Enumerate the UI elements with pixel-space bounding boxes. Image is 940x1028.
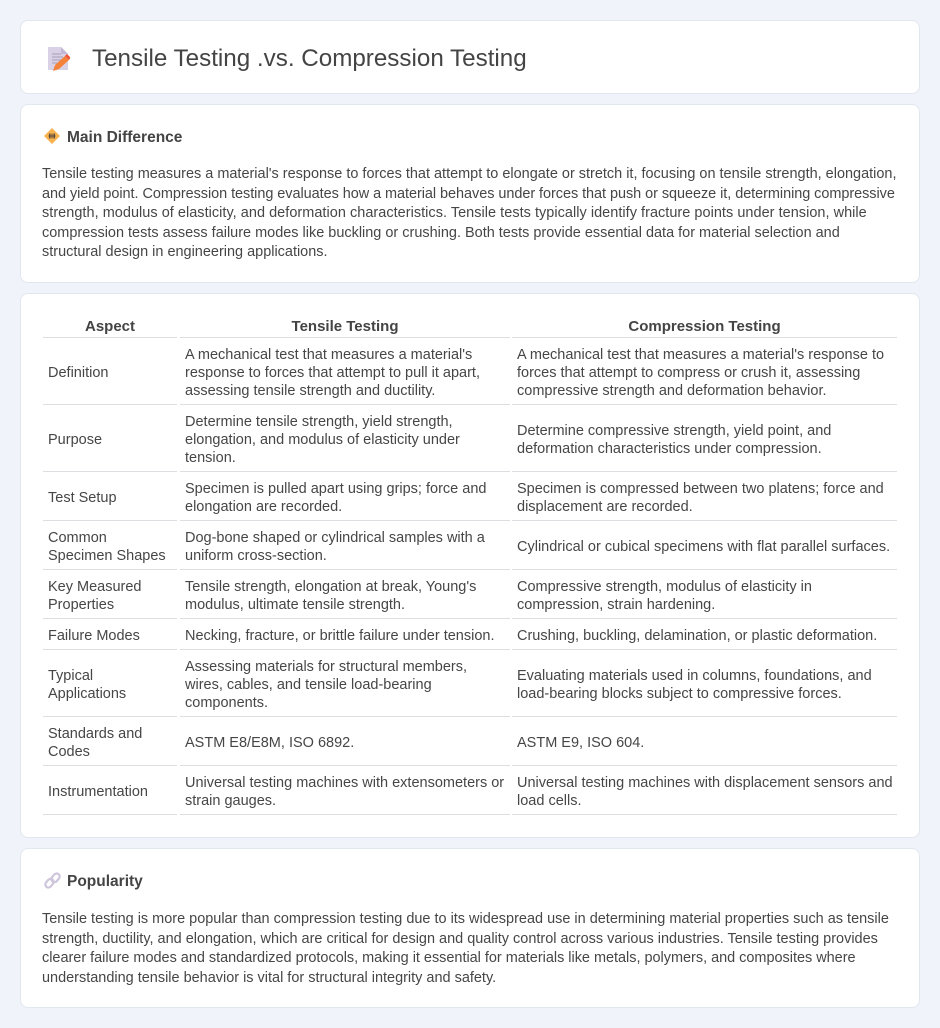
text block: main difference: compression tests assess failure modes like buckling or crushing. Both tests provide essential data for material selection and — [42, 224, 840, 240]
panel: comparison table — [20, 293, 920, 838]
table: comparison: Assessing materials for structural members, — [185, 659, 467, 675]
icon: warning diamond — [44, 128, 60, 144]
table: comparison: Crushing, buckling, delamination, or plastic deformation. — [517, 628, 877, 644]
table: comparison: Specimen is compressed between two platens; force and — [517, 481, 884, 497]
heading: popularity: Popularity — [67, 873, 143, 890]
text block: popularity: understanding tensile behavior is vital for structural integrity and safety. — [42, 970, 496, 986]
text block: popularity — [42, 911, 889, 986]
table: comparison: A mechanical test that measures a material's response to — [517, 347, 884, 363]
table: comparison: load cells. — [517, 793, 581, 809]
panel: main difference — [20, 104, 920, 283]
row: key measured properties: Key Measured — [48, 579, 142, 595]
table: comparison: Tensile strength, elongation at break, Young's — [185, 579, 476, 595]
table: comparison: strain gauges. — [185, 793, 276, 809]
table: comparison: Determine tensile strength, yield strength, — [185, 414, 453, 430]
text block: main difference: Tensile testing measures a material's response to forces that attempt to elongate or stretch it, focusing on tensile strength, elongation, — [42, 166, 896, 182]
table: comparison: Specimen is pulled apart using grips; force and — [185, 481, 486, 497]
row: typical applications: Applications — [48, 686, 126, 702]
text block: main difference: and yield point. Compression testing evaluates how a material behaves under forces that push or squeeze it, determining compressive — [42, 186, 895, 202]
table: comparison: load-bearing blocks subject to compressive forces. — [517, 686, 842, 702]
table: comparison: Universal testing machines with displacement sensors and — [517, 775, 893, 791]
table: comparison: Dog-bone shaped or cylindrical samples with a — [185, 530, 485, 546]
row: key measured properties — [48, 579, 142, 613]
row: typical applications: Typical — [48, 668, 93, 684]
text block: popularity: clearer failure modes and standardized protocols, making it essential for materials like metals, polymers, and composites where — [42, 950, 856, 966]
table: comparison: elongation, and modulus of elasticity under — [185, 432, 460, 448]
row: typical applications — [48, 668, 126, 702]
table: comparison: Universal testing machines with extensometers or — [185, 775, 504, 791]
row: common specimen shapes — [48, 530, 166, 564]
panel: title — [20, 20, 920, 94]
table: comparison: tension. — [185, 450, 236, 466]
table: comparison: wires, cables, and tensile load-bearing — [185, 677, 432, 693]
icon: chain link — [44, 872, 61, 889]
table: comparison: Cylindrical or cubical specimens with flat parallel surfaces. — [517, 539, 890, 555]
row: common specimen shapes: Specimen Shapes — [48, 548, 166, 564]
row: purpose: Purpose — [48, 432, 102, 448]
table: comparison: deformation characteristics under compression. — [517, 441, 822, 457]
text block: main difference: structural design in engineering applications. — [42, 244, 328, 260]
row: common specimen shapes: Common — [48, 530, 107, 546]
table: comparison: forces that attempt to compress or crush it, assessing — [517, 365, 860, 381]
icon: document with pencil — [48, 47, 70, 71]
text block: popularity: Tensile testing is more popular than compression testing due to its widespread use in determining material properties such as tensile — [42, 911, 889, 927]
table: comparison — [43, 318, 897, 815]
table: comparison: Necking, fracture, or brittle failure under tension. — [185, 628, 494, 644]
table: comparison: elongation are recorded. — [185, 499, 342, 515]
heading: main difference: Main Difference — [67, 129, 182, 146]
table header: Tensile Testing — [292, 318, 398, 335]
panel: popularity — [20, 848, 920, 1008]
row: instrumentation: Instrumentation — [48, 784, 148, 800]
heading: title text: Tensile Testing .vs. Compression Testing — [92, 45, 527, 72]
table: comparison: ASTM E9, ISO 604. — [517, 735, 644, 751]
table: comparison: response to forces that attempt to pull it apart, — [185, 365, 480, 381]
table: comparison: uniform cross-section. — [185, 548, 327, 564]
text block: main difference: strength, modulus of elasticity, and deformation characteristics. Tensile tests typically identify fracture points under tension, while — [42, 205, 867, 221]
table: comparison: displacement are recorded. — [517, 499, 693, 515]
row: key measured properties: Properties — [48, 597, 114, 613]
table: comparison: Determine compressive strength, yield point, and — [517, 423, 831, 439]
text block: popularity: strength, ductility, and elongation, which are critical for design and quality control across various industries. Tensile testing provides — [42, 930, 878, 946]
table: comparison: Compressive strength, modulus of elasticity in — [517, 579, 812, 595]
row: standards and codes — [48, 726, 142, 760]
table: comparison: modulus, ultimate tensile strength. — [185, 597, 405, 613]
table: comparison: compression, strain hardening. — [517, 597, 715, 613]
row: failure modes: Failure Modes — [48, 628, 140, 644]
table: comparison: ASTM E8/E8M, ISO 6892. — [185, 735, 354, 751]
row: standards and codes: Standards and — [48, 726, 142, 742]
table: comparison: compressive strength and deformation behavior. — [517, 383, 827, 399]
table: comparison: A mechanical test that measures a material's — [185, 347, 472, 363]
table header — [85, 318, 781, 335]
row: standards and codes: Codes — [48, 744, 90, 760]
row: test setup: Test Setup — [48, 490, 117, 506]
table: comparison: components. — [185, 695, 268, 711]
table header: Aspect — [85, 318, 135, 335]
table: comparison: Evaluating materials used in columns, foundations, and — [517, 668, 872, 684]
table: comparison: assessing tensile strength and ductility. — [185, 383, 435, 399]
text block: main difference — [42, 166, 896, 260]
row: definition: Definition — [48, 365, 108, 381]
table header: Compression Testing — [628, 318, 781, 335]
